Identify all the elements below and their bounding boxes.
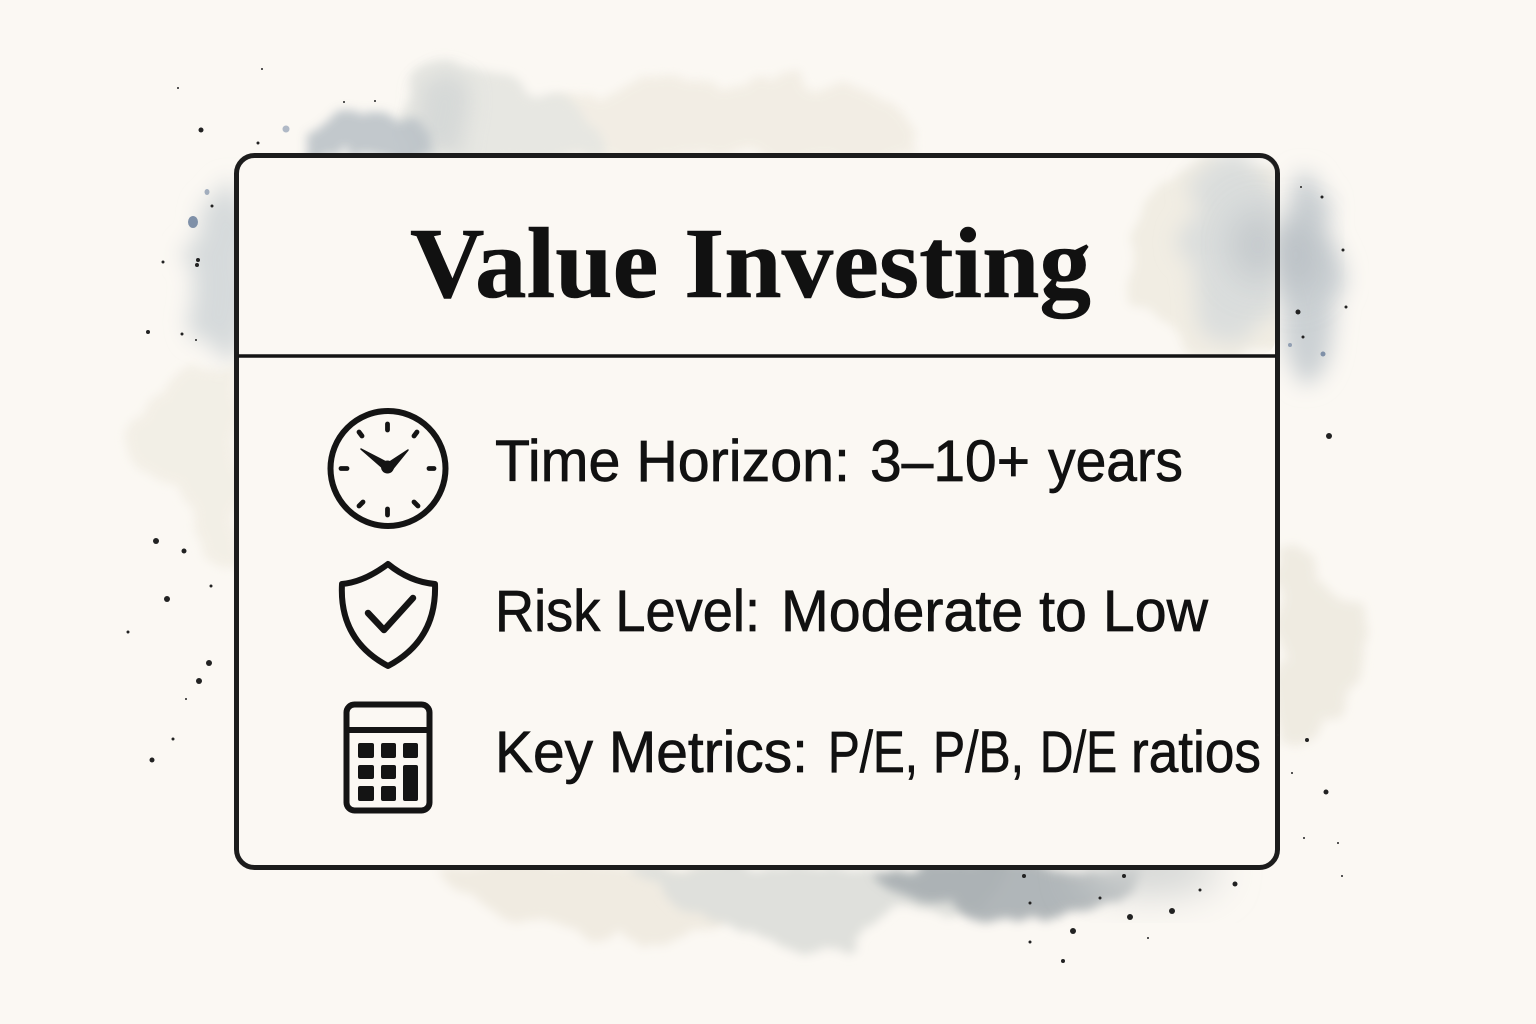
blue-grey paint drops xyxy=(188,126,1326,356)
label: risk level: Moderate to Low xyxy=(781,579,1209,644)
label: key metrics: P/B, xyxy=(933,720,1024,785)
icon: clock xyxy=(330,411,446,526)
icon: shield with check xyxy=(342,564,435,666)
row: risk level xyxy=(342,564,1209,666)
label: key metrics: D/E xyxy=(1040,720,1117,785)
row: key metrics xyxy=(346,704,1261,810)
label: key metrics: P/E, xyxy=(828,720,918,785)
row: time horizon xyxy=(330,411,1183,526)
label: key metrics xyxy=(495,720,1261,785)
title: Value Investing xyxy=(410,207,1091,319)
label: risk level xyxy=(495,579,1209,644)
label: time horizon: 3–10+ xyxy=(870,429,1030,494)
label: time horizon xyxy=(495,429,1183,494)
label: key metrics: Key Metrics: xyxy=(495,720,808,785)
value investing card xyxy=(236,155,1284,868)
ink splatter dots xyxy=(126,68,1348,963)
watercolor wash inside the card header xyxy=(1129,155,1284,355)
label: risk level: Risk Level: xyxy=(495,579,760,644)
label: time horizon: years xyxy=(1048,429,1183,494)
watercolor wash behind the card xyxy=(130,61,1377,948)
header divider xyxy=(238,354,1276,358)
label: key metrics: ratios xyxy=(1131,720,1261,785)
label: time horizon: Time Horizon: xyxy=(495,429,850,494)
card panel xyxy=(236,156,1278,868)
icon: calculator xyxy=(346,704,430,810)
